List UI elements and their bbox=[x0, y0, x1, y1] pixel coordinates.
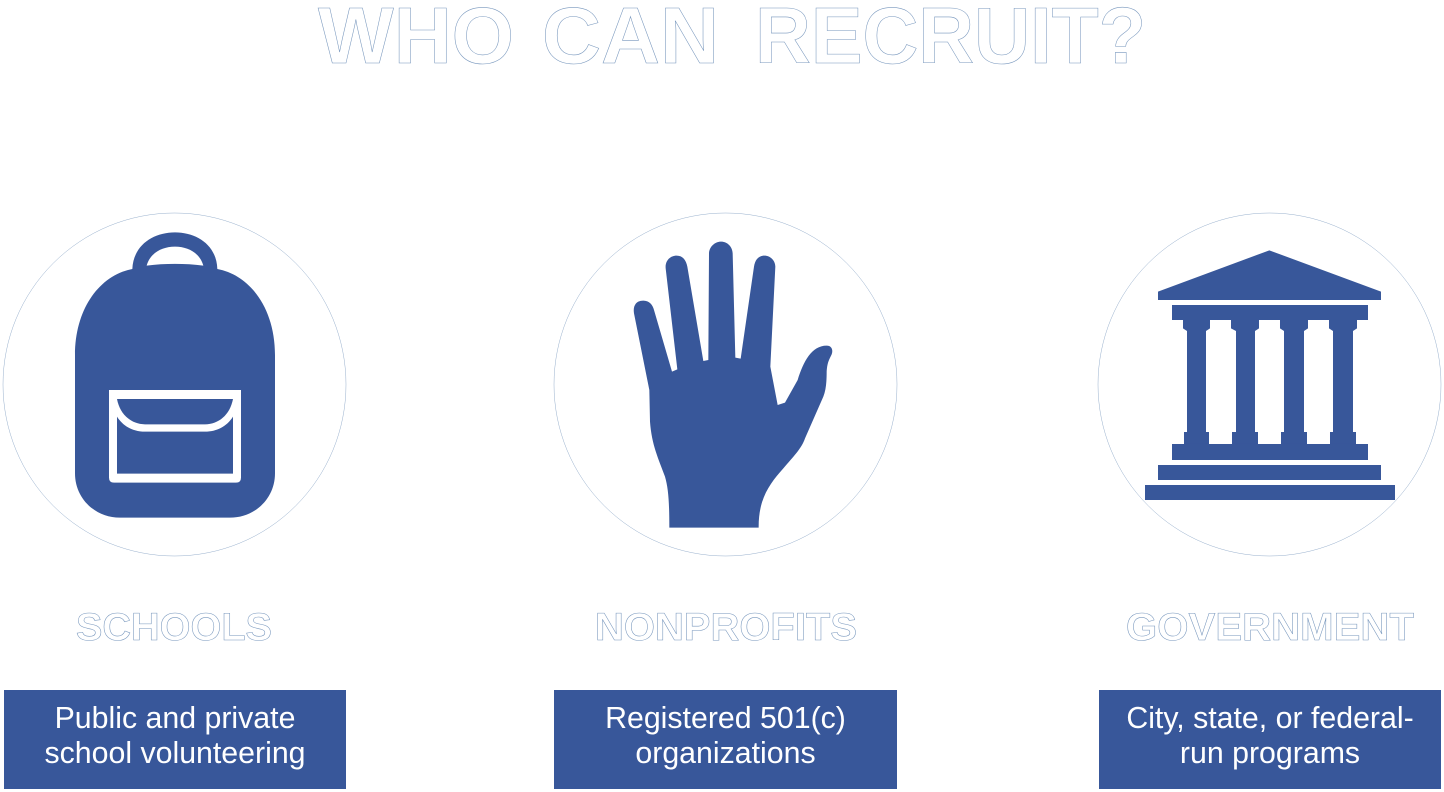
icon: raised hand bbox=[634, 242, 832, 528]
text box: schools bbox=[4, 690, 346, 789]
text box: government: run programs bbox=[1180, 737, 1360, 770]
icon circle: schools bbox=[3, 213, 346, 556]
panel: nonprofits bbox=[554, 213, 897, 789]
icon circle: nonprofits bbox=[554, 213, 897, 556]
heading: nonprofits: NONPROFITS bbox=[595, 606, 857, 649]
panel: schools bbox=[3, 213, 346, 789]
heading: government: GOVERNMENT bbox=[1126, 606, 1414, 649]
text box: nonprofits bbox=[554, 690, 897, 789]
heading: schools: SCHOOLS bbox=[76, 606, 272, 649]
text box: schools: school volunteering bbox=[44, 737, 306, 770]
icon: backpack bbox=[75, 232, 275, 518]
icon: government building bbox=[1145, 250, 1395, 500]
panel: government bbox=[1098, 213, 1441, 789]
text box: government: City, state, or federal- bbox=[1126, 702, 1414, 735]
title bbox=[318, 0, 1146, 80]
text box: government bbox=[1099, 690, 1441, 789]
icon circle: government bbox=[1098, 213, 1441, 556]
text box: nonprofits: Registered 501(c) bbox=[605, 702, 846, 735]
text box: schools: Public and private bbox=[55, 702, 295, 735]
text box: nonprofits: organizations bbox=[635, 737, 816, 770]
